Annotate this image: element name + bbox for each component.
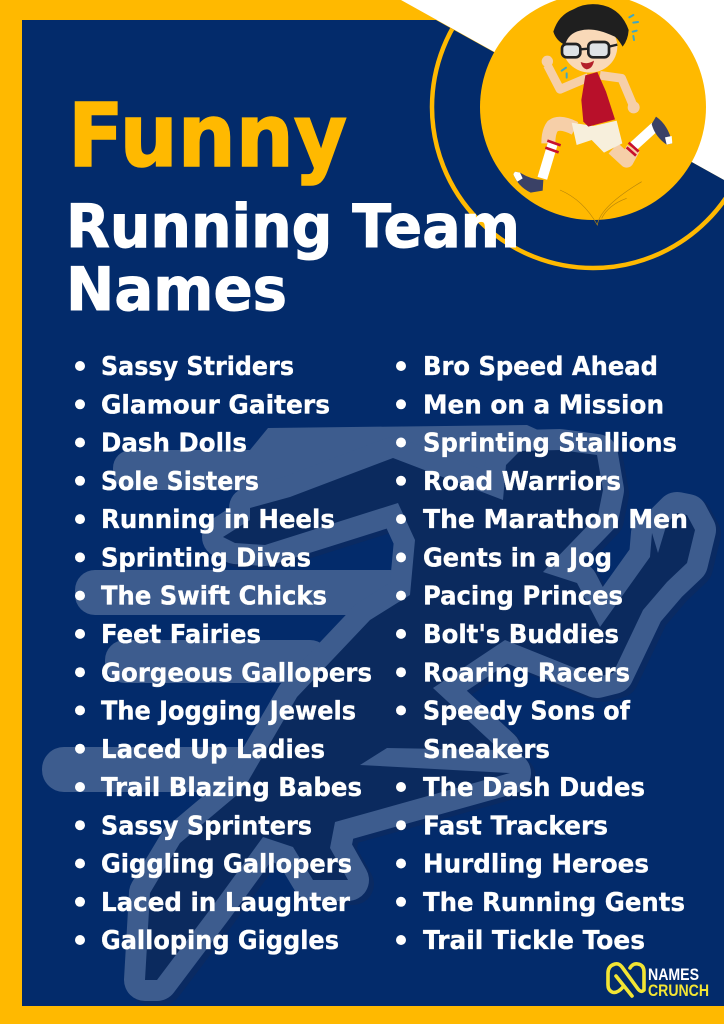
watermark: runner silhouette with speed lines bbox=[42, 425, 700, 984]
list: left column of names bbox=[75, 352, 372, 956]
ring around circle bbox=[432, 0, 724, 268]
logo: Names Crunch: CRUNCH bbox=[648, 982, 709, 1000]
list: right column of names: Roaring Racers bbox=[423, 658, 630, 688]
list: right column of names: Sprinting Stallions bbox=[423, 429, 677, 459]
list: right column of names: The Running Gents bbox=[423, 888, 685, 918]
list: right column of names: Hurdling Heroes bbox=[423, 850, 649, 880]
list: left column of names: The Jogging Jewels bbox=[101, 696, 356, 726]
logo: Names Crunch bbox=[608, 964, 709, 1000]
list: left column of names: Galloping Giggles bbox=[101, 926, 339, 956]
list: left column of names: Trail Blazing Babes bbox=[101, 773, 362, 803]
list: left column of names: The Swift Chicks bbox=[101, 582, 327, 612]
list: right column of names: Bro Speed Ahead bbox=[423, 352, 658, 382]
title: Running Team: Running Team bbox=[66, 192, 520, 262]
title: Names: Names bbox=[66, 255, 287, 325]
list: left column of names: Giggling Gallopers bbox=[101, 850, 352, 880]
list: left column of names: Running in Heels bbox=[101, 505, 335, 535]
list: left column of names: Glamour Gaiters bbox=[101, 390, 330, 420]
list: left column of names: Sassy Sprinters bbox=[101, 811, 312, 841]
list: left column of names: Gorgeous Gallopers bbox=[101, 658, 372, 688]
title: Funny: Funny bbox=[68, 85, 347, 187]
list: left column of names: Sole Sisters bbox=[101, 467, 259, 497]
list: left column of names: Laced Up Ladies bbox=[101, 735, 325, 765]
white corner bbox=[401, 0, 724, 180]
list: right column of names: Men on a Mission bbox=[423, 390, 664, 420]
list: right column of names: Road Warriors bbox=[423, 467, 621, 497]
list: right column of names: Gents in a Jog bbox=[423, 544, 612, 574]
list: right column of names: The Marathon Men bbox=[423, 505, 688, 535]
list: left column of names: Sassy Striders bbox=[101, 352, 294, 382]
list: right column of names bbox=[396, 352, 688, 956]
list: right column of names: Fast Trackers bbox=[423, 811, 608, 841]
list: left column of names: Sprinting Divas bbox=[101, 544, 311, 574]
list: right column of names: Speedy Sons of bbox=[423, 696, 631, 726]
list: right column of names: Sneakers bbox=[423, 735, 550, 765]
list: right column of names: Pacing Princes bbox=[423, 582, 623, 612]
logo: Names Crunch: NAMES bbox=[648, 966, 699, 984]
list: left column of names: Dash Dolls bbox=[101, 429, 247, 459]
list: right column of names: Trail Tickle Toes bbox=[423, 926, 645, 956]
illustration: running boy bbox=[513, 4, 672, 225]
list: right column of names: Bolt's Buddies bbox=[423, 620, 619, 650]
yellow circle bbox=[480, 0, 706, 220]
list: left column of names: Feet Fairies bbox=[101, 620, 261, 650]
list: left column of names: Laced in Laughter bbox=[101, 888, 350, 918]
list: right column of names: The Dash Dudes bbox=[423, 773, 645, 803]
